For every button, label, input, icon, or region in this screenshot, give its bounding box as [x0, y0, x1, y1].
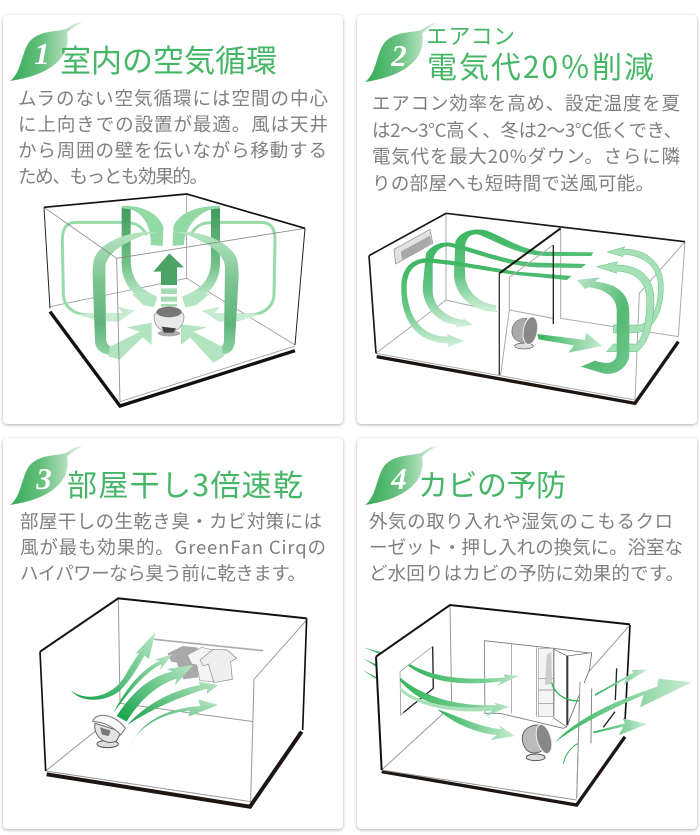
icon: leaf 2 [365, 23, 437, 82]
number 1: 1 [34, 36, 50, 71]
icon: leaf 1 [10, 22, 82, 81]
arrow: fan airflow [537, 333, 603, 353]
panel: card 4 background [357, 438, 697, 829]
closet [484, 641, 592, 728]
arrow: upward airflow [153, 253, 184, 307]
arrows: airflow from fan [71, 632, 218, 747]
text block 4: 外気の取り入れや湿気のこもるクロ [369, 508, 673, 534]
icon: leaf 3 [10, 446, 82, 505]
laundry rail and shirts [154, 639, 263, 683]
text block 2: 電気代を最大20%ダウン。さらに隣 [372, 143, 680, 169]
title 2: エアコン [426, 19, 515, 51]
icon: fan 3 [93, 715, 125, 748]
panel: card 1 background [3, 15, 343, 424]
panel 1: heading group [10, 22, 277, 81]
text block 3: 部屋干しの生乾き臭・カビ対策には [20, 508, 322, 534]
text block 3 [20, 508, 326, 586]
title 4: カビの予防 [418, 461, 566, 505]
icon: fan 1 [154, 307, 184, 336]
text block 3: 風が最も効果的。GreenFan Cirqの [20, 534, 326, 560]
ribbons: outer thin [62, 222, 275, 324]
text block 1: に上向きでの設置が最適。風は天井 [18, 111, 328, 137]
icon: fan 2 [512, 316, 540, 349]
text block 1 [18, 85, 328, 189]
text block 4: ど水回りはカビの予防に効果的です。 [369, 560, 684, 586]
panel 2: heading group [365, 23, 437, 82]
left window [400, 647, 433, 715]
title 2: 電気代20％削減 [427, 43, 654, 87]
text block 1: ため、もっとも効果的。 [18, 163, 208, 189]
icon: air conditioner [394, 229, 433, 264]
text block 2: エアコン効率を高め、設定温度を夏 [372, 90, 680, 116]
text block 1: ムラのない空気循環には空間の中心 [18, 85, 328, 111]
panel 4: heading group [365, 446, 437, 505]
ribbons: left room [401, 230, 593, 347]
diagram 4: ventilated room with closet [363, 605, 692, 805]
title 2 [426, 19, 654, 87]
text block 4: ーゼット・押し入れの換気に。浴室な [369, 534, 683, 560]
right window [577, 625, 630, 798]
arrows: air entering [363, 647, 519, 740]
text block 2 [372, 90, 682, 196]
title 3: 部屋干し3倍速乾 [67, 461, 303, 505]
number 4: 4 [390, 461, 407, 496]
ribbons: inner dark [122, 206, 220, 307]
panel: card 3 background [3, 438, 343, 829]
diagram 1: room with circulation [44, 194, 305, 406]
ribbons: front wide [93, 232, 239, 363]
icon: fan 4 [522, 723, 555, 761]
text block 1: から周囲の壁を伝いながら移動する [18, 137, 327, 163]
text block 4 [369, 508, 684, 586]
title 1: 室内の空気循環 [60, 36, 277, 81]
diagram 2: two rooms with air conditioner [369, 213, 685, 403]
panel 3: heading group [10, 446, 82, 505]
text block 2: りの部屋へも短時間で送風可能。 [372, 170, 654, 196]
panel: card 2 background [357, 15, 697, 424]
number 3: 3 [35, 461, 52, 496]
number 2: 2 [390, 38, 407, 73]
text block 3: ハイパワーなら臭う前に乾きます。 [20, 560, 306, 586]
ribbons: right room [577, 247, 663, 374]
text block 2: は2～3°C高く、冬は2～3°C低くでき、 [372, 117, 682, 143]
diagram 3: drying room [40, 598, 307, 807]
arrows: air leaving [554, 669, 692, 743]
icon: leaf 4 [365, 446, 437, 505]
